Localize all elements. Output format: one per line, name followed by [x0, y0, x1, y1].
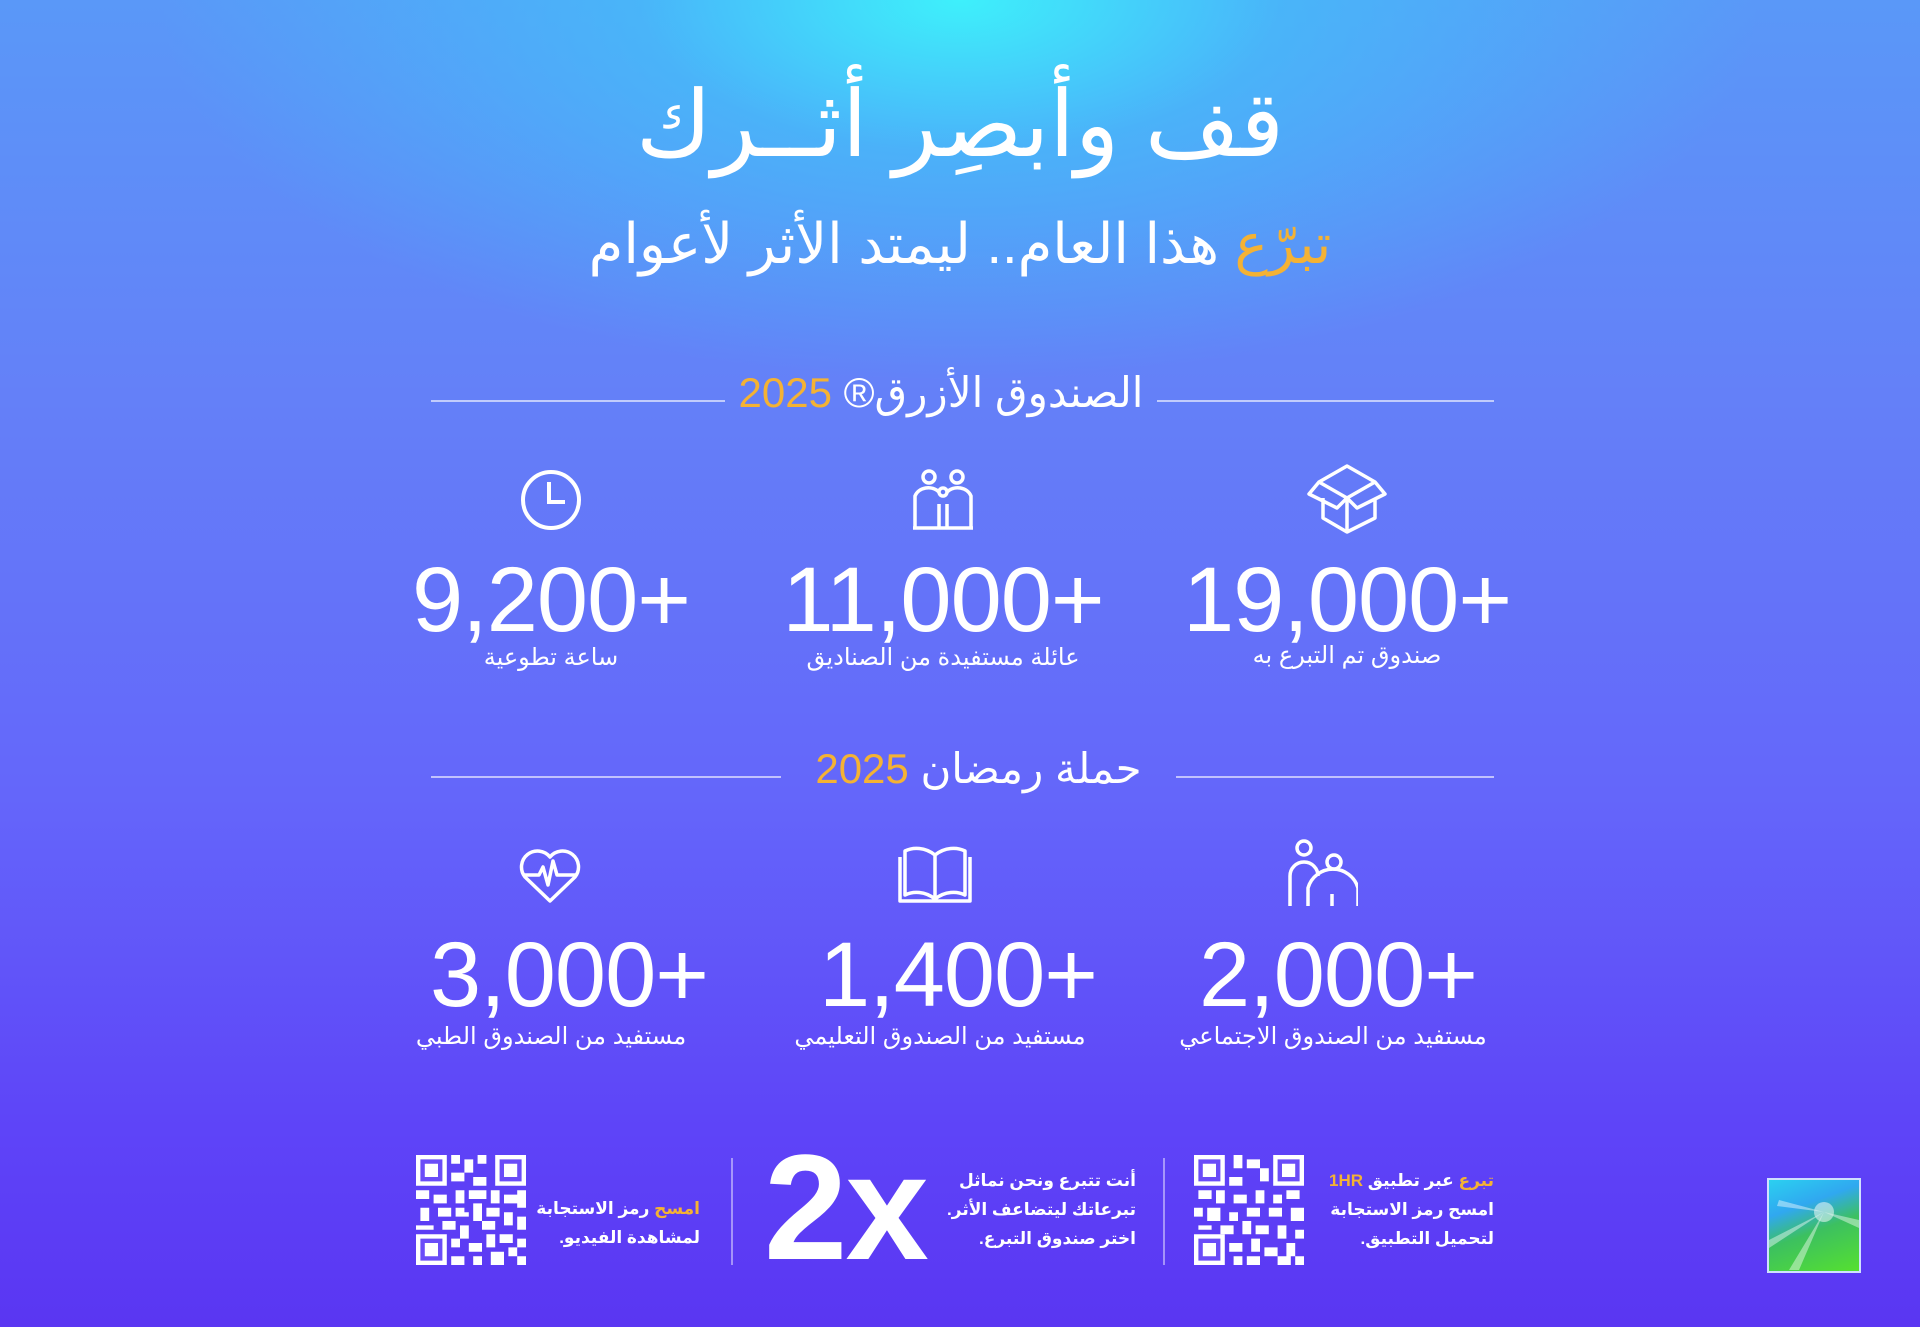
- text: scan for video: امسح رمز الاستجابة: [536, 1199, 700, 1218]
- text: app download: تبرع عبر تطبيق 1HR: [1329, 1171, 1494, 1190]
- text: matching donations: [947, 1169, 1136, 1248]
- title: قف وأبصِر أثــرك: [636, 74, 1284, 176]
- section header: blue box 2025: الصندوق الأزرق® 2025: [738, 369, 1143, 416]
- text: matching donations: أنت تتبرع ونحن نماثل: [959, 1171, 1136, 1190]
- QR code: app: [1194, 1155, 1304, 1265]
- stat: education fund: [794, 846, 1097, 1050]
- stat: families: عائلة مستفيدة من الصناديق: [806, 644, 1080, 671]
- stat: boxes donated: 19,000+: [1183, 549, 1511, 651]
- stat: social fund: [1179, 839, 1487, 1050]
- stat: medical fund: مستفيد من الصندوق الطبي: [416, 1023, 686, 1050]
- stat: boxes donated: صندوق تم التبرع به: [1253, 642, 1441, 669]
- divider: [1163, 1158, 1165, 1265]
- stat: social fund: 2,000+: [1199, 924, 1477, 1026]
- icon: box: [1307, 464, 1387, 534]
- stat: families: [782, 469, 1104, 671]
- logo: [1767, 1178, 1861, 1273]
- stat: volunteer hours: [412, 470, 690, 671]
- stat: volunteer hours: 9,200+: [412, 549, 690, 651]
- stat: volunteer hours: ساعة تطوعية: [484, 644, 618, 671]
- text: matching donations: تبرعاتك ليتضاعف الأثر.: [947, 1200, 1136, 1219]
- section header: Ramadan campaign 2025: حملة رمضان 2025: [815, 745, 1142, 792]
- stat: medical fund: 3,000+: [430, 924, 708, 1026]
- text: scan for video: [536, 1199, 700, 1248]
- icon: family: [913, 469, 973, 530]
- subtitle: تبرّع هذا العام.. ليمتد الأثر لأعوام: [589, 212, 1331, 275]
- stat: social fund: مستفيد من الصندوق الاجتماعي: [1179, 1023, 1487, 1050]
- text: app download: امسح رمز الاستجابة: [1330, 1200, 1494, 1219]
- text: matching donations: اختر صندوق التبرع.: [979, 1229, 1136, 1248]
- text: scan for video: لمشاهدة الفيديو.: [559, 1228, 700, 1247]
- icon: heart pulse: [520, 849, 580, 903]
- stat: families: 11,000+: [782, 549, 1104, 651]
- stat: education fund: 1,400+: [819, 924, 1097, 1026]
- icon: people: [1288, 839, 1358, 906]
- text: app download: لتحميل التطبيق.: [1361, 1229, 1494, 1248]
- stat: medical fund: [416, 849, 708, 1050]
- icon: open book: [898, 846, 972, 903]
- stat: boxes donated: [1183, 464, 1511, 669]
- icon: clock: [521, 470, 581, 530]
- divider: [731, 1158, 733, 1265]
- text: app download: [1329, 1171, 1494, 1248]
- 2x match: 2x: [764, 1123, 927, 1291]
- stat: education fund: مستفيد من الصندوق التعليمي: [794, 1023, 1086, 1050]
- QR code: video: [416, 1155, 526, 1265]
